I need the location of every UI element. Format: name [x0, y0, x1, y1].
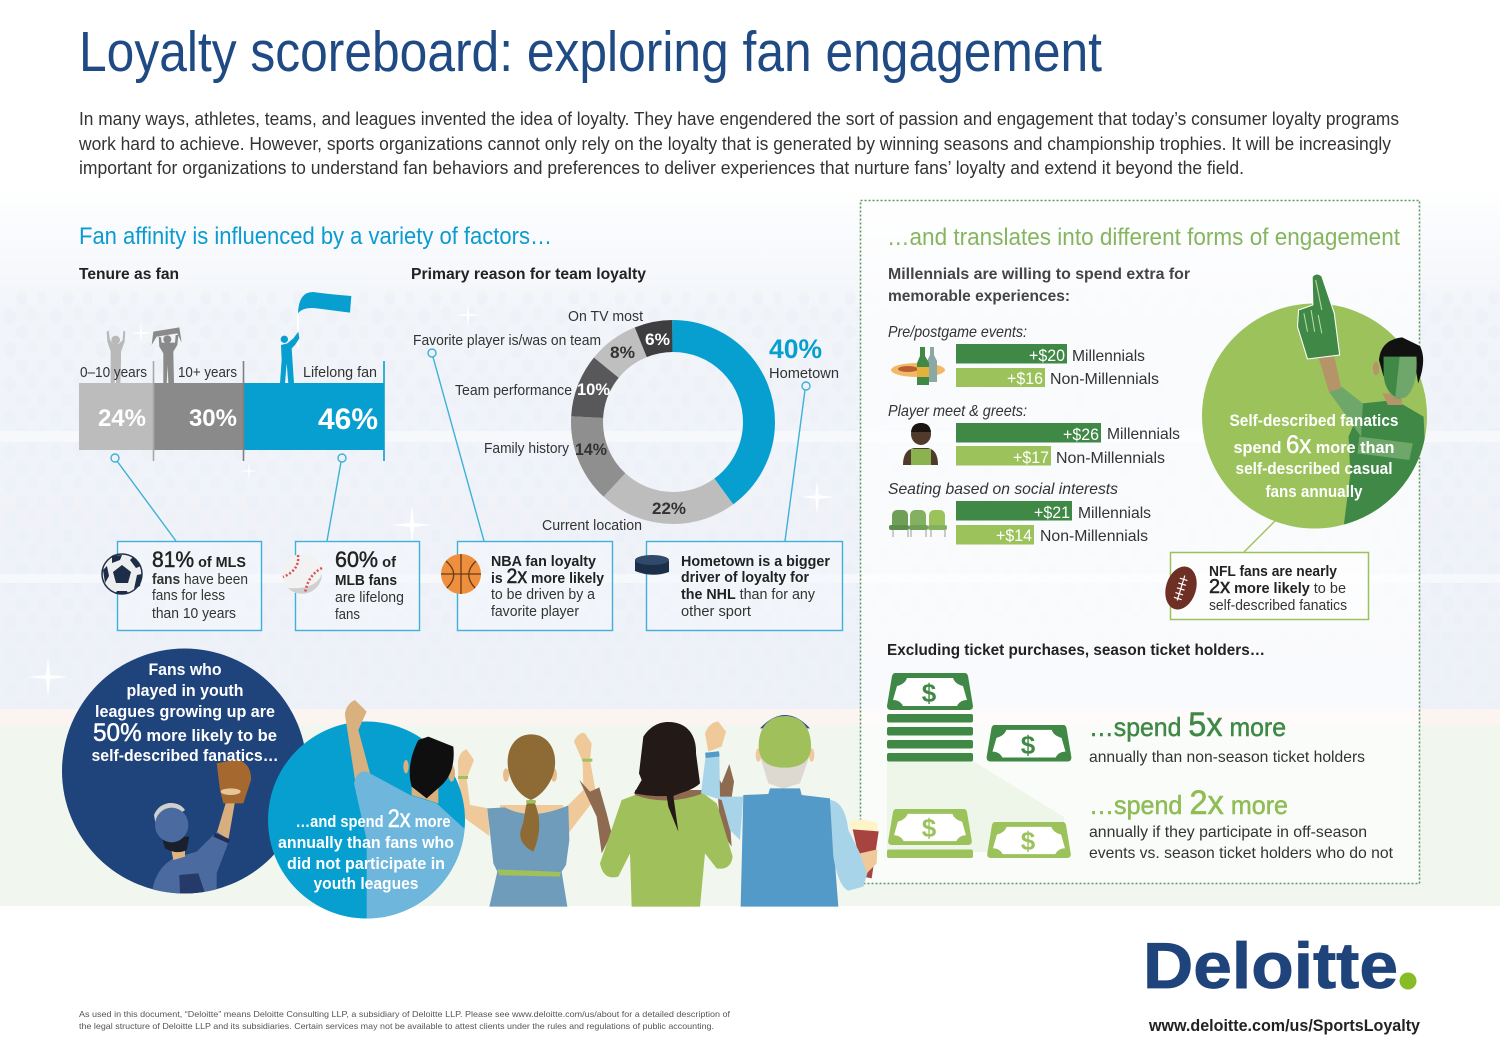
stat circle: fanatics: spend 6x more than — [1234, 431, 1394, 459]
stat circle: spend 2x: did not participate in — [287, 854, 445, 873]
icon: pizza and bottles — [891, 347, 945, 385]
icon: baseball — [282, 554, 322, 594]
spend group: seating — [888, 481, 1151, 545]
heading: tenure as fan: Tenure as fan — [79, 266, 179, 283]
callout: MLB: are lifelong — [335, 589, 404, 606]
subheading: season ticket holders: Excluding ticket purchases, season ticket holders… — [887, 642, 1265, 659]
icon: single light bill — [987, 822, 1071, 858]
stat circle: fanatics: self-described casual — [1236, 459, 1392, 478]
stat circle: youth leagues: self-described fanatics… — [92, 746, 278, 765]
footer legal text — [79, 1009, 731, 1031]
stat circle: youth leagues: played in youth — [126, 681, 244, 700]
spend group: player meet and greets: Millennials — [1107, 426, 1180, 443]
spend group: player meet and greets — [888, 403, 1180, 467]
panel: forms of engagement — [860, 200, 1420, 884]
icon: single light bill: $ — [1021, 826, 1036, 856]
fans illustration — [458, 715, 879, 907]
stat circle: youth leagues: 50% more likely to be — [93, 719, 277, 747]
callout: MLB: fans — [335, 606, 360, 623]
stat: spend 5x — [1089, 706, 1365, 766]
stat circle: fanatics — [1202, 304, 1429, 530]
spend group: pre/postgame events — [888, 324, 1159, 388]
callout: NFL: NFL fans are nearly — [1209, 564, 1337, 580]
callout: NBA: NBA fan loyalty — [491, 553, 597, 570]
callout: NHL: Hometown is a bigger — [681, 553, 830, 570]
spend group: player meet and greets: +$17 — [1013, 449, 1049, 467]
callout: NFL: 2x more likely to be — [1209, 576, 1346, 598]
icon: stadium seats — [889, 510, 947, 537]
spend group: seating: +$21 — [1034, 504, 1070, 522]
stat: spend 5x: …spend 5x more — [1089, 706, 1286, 744]
callout: NBA: favorite player — [491, 603, 579, 620]
icon: football — [1160, 563, 1202, 613]
intro text: important for organizations to understand fan behaviors and preferences to deliver experiences that nurture fans’ loyalty and extend it beyond the field. — [79, 158, 1244, 178]
spend group: player meet and greets: Non-Millennials — [1056, 450, 1165, 467]
icon: hockey puck — [635, 555, 669, 575]
callout: MLS: fans have been — [152, 571, 248, 588]
callout: NHL: the NHL than for any — [681, 586, 815, 603]
footer legal text: the legal structure of Deloitte LLP and its subsidiaries. Certain services may not be available to attest clients under the rules and regulations of public accounting. — [79, 1021, 714, 1031]
stat: spend 2x: …spend 2x more — [1089, 784, 1288, 822]
callout: NBA — [458, 542, 612, 630]
title: Loyalty scoreboard: exploring fan engagement — [79, 20, 1102, 84]
tenure bar chart: Lifelong fan — [303, 364, 377, 381]
fan: woman with ponytail — [458, 733, 597, 907]
heading: forms of engagement: …and translates into different forms of engagement — [887, 224, 1400, 251]
spend group: pre/postgame events: Millennials — [1072, 348, 1145, 365]
donut labels — [413, 309, 839, 534]
stat circle: youth leagues — [62, 648, 307, 897]
icon: single bill: $ — [1021, 730, 1036, 760]
callout: NFL — [1170, 521, 1368, 620]
icon: basketball — [441, 554, 481, 594]
stat: spend 2x: annually if they participate in off-season — [1089, 824, 1367, 841]
fan: man in cap — [701, 715, 879, 907]
subheading: millennials — [888, 266, 1190, 305]
icon: money stack 5x: $ — [922, 678, 937, 708]
website: www.deloitte.com/us/SportsLoyalty — [1148, 1017, 1421, 1035]
icon: single bill — [987, 725, 1071, 762]
callout: NHL: driver of loyalty for — [681, 569, 809, 586]
callout: NHL: other sport — [681, 603, 752, 620]
donut labels: 22% — [652, 500, 686, 518]
icon: money stack 2x — [887, 809, 973, 858]
callout: MLS — [118, 542, 262, 630]
stat circle: youth leagues: leagues growing up are — [95, 702, 275, 721]
donut labels: Hometown — [769, 366, 839, 382]
icon: player — [903, 423, 938, 465]
Deloitte logo: Deloitte — [1143, 929, 1398, 1002]
spend group: seating: Non-Millennials — [1040, 528, 1148, 545]
callout: NFL: self-described fanatics — [1209, 598, 1347, 614]
donut labels: Team performance — [455, 383, 572, 399]
icon: money stack 5x — [887, 673, 973, 762]
callout: MLB: MLB fans — [335, 572, 397, 589]
icon: soccer ball — [102, 554, 142, 594]
spend group: seating: Seating based on social interests — [888, 481, 1118, 498]
donut labels: 14% — [575, 441, 607, 459]
spend group: player meet and greets: +$26 — [1063, 426, 1099, 444]
comparison wedge — [887, 761, 1064, 852]
tenure bar chart: 46% — [318, 403, 378, 436]
stat circle: spend 2x: youth leagues — [314, 874, 418, 893]
cheering fan figure — [345, 700, 465, 918]
tenure bar chart: 0–10 years — [80, 364, 147, 381]
heading: fan affinity: Fan affinity is influenced by a variety of factors… — [79, 223, 552, 250]
subheading: millennials: memorable experiences: — [888, 288, 1070, 305]
stat circle: youth leagues: Fans who — [148, 660, 222, 679]
stat: spend 2x: events vs. season ticket holders who do not — [1089, 845, 1394, 862]
stat: spend 5x: annually than non-season ticket holders — [1089, 749, 1365, 766]
callout: MLB — [296, 542, 420, 630]
fan: woman in green — [579, 722, 734, 907]
stat circle: spend 2x: …and spend 2x more — [296, 805, 450, 833]
face and hair — [1373, 337, 1423, 399]
donut labels: 40% — [769, 334, 822, 364]
youth player figure — [152, 759, 251, 897]
donut labels: 6% — [645, 331, 670, 349]
intro text — [78, 109, 1399, 178]
icon: money stack 2x: $ — [922, 813, 937, 843]
callout: MLS: than 10 years — [152, 605, 236, 622]
spend group: player meet and greets: Player meet & greets: — [888, 403, 1027, 420]
tenure bar chart — [79, 361, 384, 461]
tenure bar chart: 10+ years — [178, 364, 237, 381]
donut labels: On TV most — [568, 309, 643, 325]
spend group: pre/postgame events: +$20 — [1029, 347, 1065, 365]
stat circle: fanatics: Self-described fanatics — [1230, 411, 1398, 430]
tenure bar chart: 24% — [98, 405, 146, 432]
donut labels: Family history — [484, 441, 570, 457]
intro text: In many ways, athletes, teams, and leagues invented the idea of loyalty. They have engendered the sort of passion and engagement that today’s consumer loyalty programs — [79, 109, 1399, 129]
stadium background — [0, 190, 1500, 906]
subheading: millennials: Millennials are willing to spend extra for — [888, 266, 1190, 283]
fan silhouettes — [107, 292, 351, 383]
spend group: pre/postgame events: Non-Millennials — [1050, 371, 1159, 388]
spend group: pre/postgame events: Pre/postgame events: — [888, 324, 1027, 341]
stat circle: spend 2x — [268, 700, 477, 923]
footer legal text: As used in this document, “Deloitte” means Deloitte Consulting LLP, a subsidiary of Deloitte LLP. Please see www.deloitte.com/us/about for a detailed description of — [79, 1009, 731, 1019]
callout: MLB: 60% of — [335, 547, 397, 572]
spend group: pre/postgame events: +$16 — [1007, 370, 1043, 388]
stat circle: fanatics: fans annually — [1266, 482, 1363, 501]
donut labels: 10% — [577, 381, 610, 399]
callout: NBA: to be driven by a — [491, 586, 596, 603]
spend group: seating: Millennials — [1078, 505, 1151, 522]
callout: NHL — [646, 542, 842, 630]
donut labels: Favorite player is/was on team — [413, 333, 601, 349]
tenure bar chart: 30% — [189, 405, 237, 432]
stat circle: spend 2x: annually than fans who — [278, 833, 454, 852]
connector lines — [111, 349, 810, 541]
callout: MLS: fans for less — [152, 587, 225, 604]
stat: spend 2x — [1089, 784, 1394, 862]
intro text: work hard to achieve. However, sports organizations cannot only rely on the loyalty that is generated by winning seasons and championship trophies. It will be increasingly — [78, 134, 1391, 154]
fanatic fan figure — [1318, 357, 1429, 530]
donut labels: 8% — [610, 344, 635, 362]
donut chart — [587, 336, 759, 508]
callout: MLS: 81% of MLS — [152, 547, 246, 572]
donut labels: Current location — [542, 518, 642, 534]
callout: NBA: is 2x more likely — [491, 565, 605, 588]
spend group: seating: +$14 — [996, 527, 1032, 545]
icon: foam finger — [1297, 274, 1340, 359]
heading: primary reason for team loyalty: Primary reason for team loyalty — [411, 266, 646, 283]
